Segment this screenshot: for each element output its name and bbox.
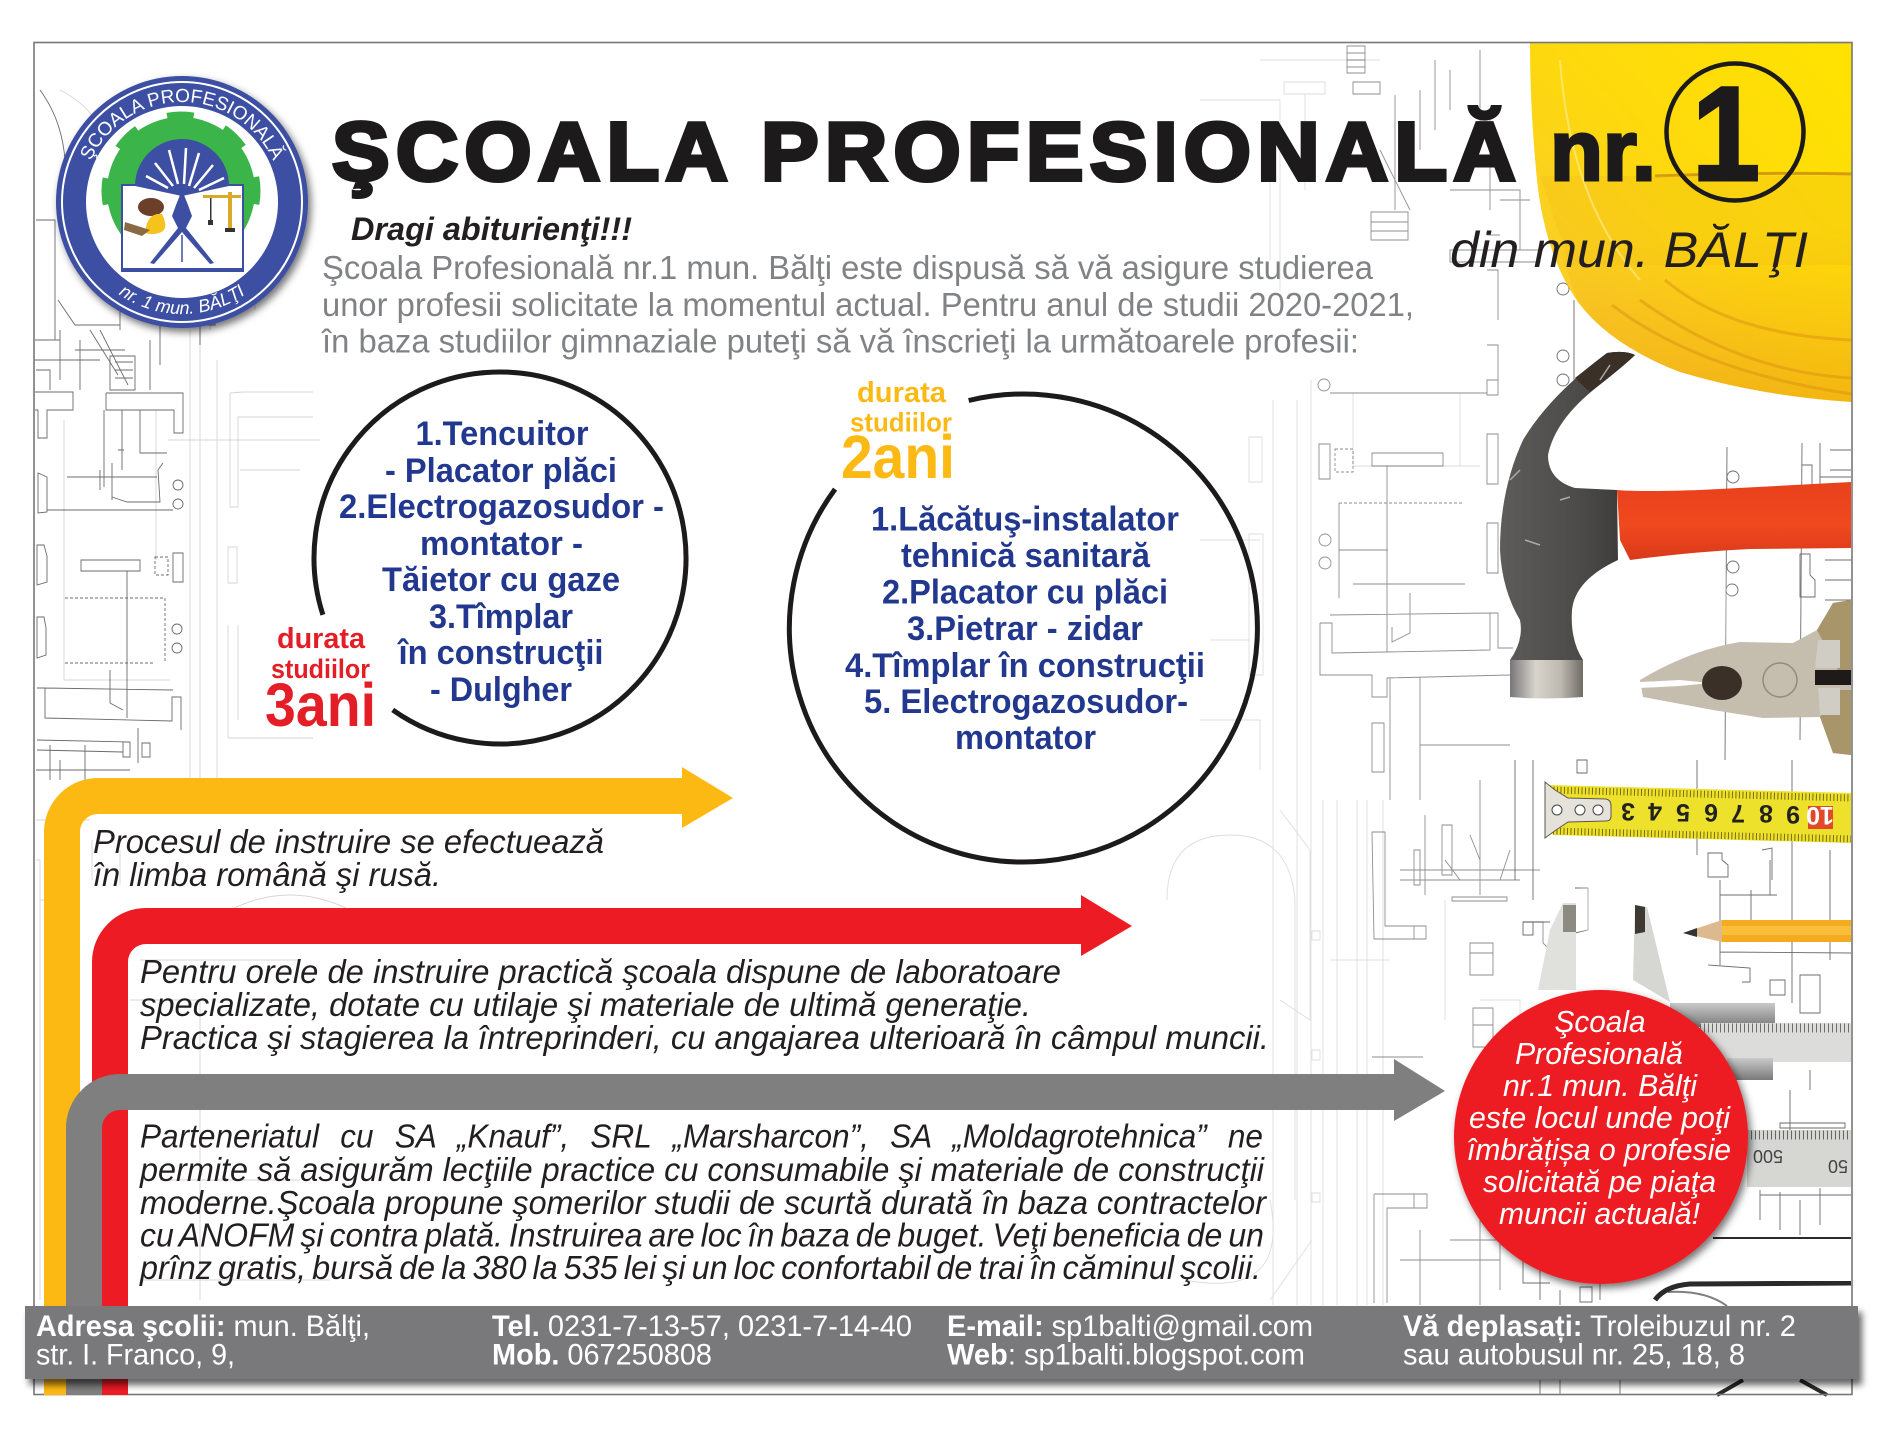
title number: 1 [1692,60,1760,209]
callout: red circle [1454,990,1748,1284]
blueprint background: right, strong lines [1318,46,1550,1305]
text block: practical training: specializate, dotate cu utilaje şi materiale de ultimă generaţie. [140,986,1031,1023]
blueprint background: centre-right, faint lines [1167,60,1520,1305]
title number: nr. [1550,104,1656,199]
text block: language of instruction: în limba română şi rusă. [93,856,441,893]
logo fan [135,139,229,196]
3-year professions list: - Placator plăci [385,452,617,490]
footer: address [36,1310,370,1371]
duration label: 2 years: studiilor [850,408,952,438]
pliers illustration [1640,600,1851,755]
2-year professions list [845,501,1205,757]
intro paragraph: în baza studiilor gimnaziale puteţi să vă înscrieţi la următoarele profesii: [321,322,1359,360]
arrow: yellow [62,767,733,1395]
text block: partnerships and benefits: prînz gratis, bursă de la 380 la 535 lei şi un loc confortabil de trai în căminul şcolii. [139,1249,1261,1286]
tape measure numbers: 8 [1759,799,1773,827]
2-year professions list: 3.Pietrar - zidar [907,610,1143,648]
tape measure numbers [1621,797,1834,829]
steel ruler illustration [1747,1130,1851,1187]
footer: directions: Vă deplasați: Troleibuzul nr. 2 [1403,1310,1796,1343]
hard hat illustration [1530,43,1852,402]
pencil illustration [1683,920,1851,942]
3-year professions list [339,415,664,709]
logo worker tools [124,198,165,236]
callout text: îmbrățișa o profesie [1467,1132,1731,1167]
3-year professions list: 1.Tencuitor [416,415,588,453]
tape measure numbers: 4 [1648,797,1662,825]
white band between glasses lines [1695,1240,1851,1281]
ruler numbers: 500 [1753,1146,1783,1166]
3-year professions list: - Dulgher [430,671,572,709]
footer: email and web: E-mail: sp1balti@gmail.com [947,1310,1313,1343]
2-year professions list: 4.Tîmplar în construcţii [845,647,1205,685]
callout text: Şcoala [1554,1004,1646,1039]
glasses illustration [1655,1238,1851,1395]
logo lettering: ŞCOALA PROFESIONALĂ [81,88,286,161]
callout text: este locul unde poţi [1469,1100,1731,1135]
tape measure numbers: 6 [1704,798,1718,826]
logo compass [150,190,214,264]
white fade behind tools [1590,420,1720,1000]
callout text: solicitată pe piaţa [1483,1164,1716,1199]
intro paragraph [321,249,1414,360]
duration label: 3 years: durata [277,623,366,655]
blueprint background: left, strong lines [34,90,215,780]
greeting: Dragi abiturienţi!!! [351,211,632,247]
intro paragraph: Şcoala Profesională nr.1 mun. Bălţi este dispusă să vă asigure studierea [322,249,1374,286]
duration label: 2 years: durata [857,377,947,409]
ruler numbers: 50 [1828,1156,1848,1176]
tape measure numbers: 10 [1806,801,1834,829]
callout text: nr.1 mun. Bălţi [1503,1068,1698,1103]
title: ŞCOALA PROFESIONALĂ [332,105,1522,198]
tape measure illustration [1545,782,1851,843]
intro paragraph: unor profesii solicitate la momentul actual. Pentru anul de studii 2020-2021, [322,286,1414,323]
3-year professions list: în construcţii [397,634,604,672]
footer contact bar [25,1306,1858,1379]
3-year professions list: Tăietor cu gaze [382,561,620,599]
logo [53,74,317,338]
footer: email and web: Web: sp1balti.blogspot.com [947,1338,1305,1371]
text block: partnerships and benefits: cu ANOFM şi contra plată. Instruirea are loc în baza de buget. Veţi beneficia de un [140,1217,1264,1254]
circle: 2-year programmes [789,377,1257,862]
duration label: 2 years [841,377,955,491]
title number [1550,60,1804,209]
arrow: grey [84,1059,1445,1395]
footer: address: str. I. Franco, 9, [36,1338,235,1371]
footer: email and web [947,1310,1313,1371]
callout text: Profesională [1515,1036,1683,1071]
text block: partnerships and benefits: Parteneriatul cu SA „Knauf”, SRL „Marsharcon”, SA „Moldagrotehnica” ne [140,1118,1263,1154]
footer: phone: Tel. 0231-7-13-57, 0231-7-14-40 [492,1310,912,1343]
footer: directions: sau autobusul nr. 25, 18, 8 [1403,1338,1745,1371]
duration label: 2 years: 2ani [841,423,955,491]
callout text: muncii actuală! [1499,1196,1700,1231]
hammer illustration [1500,352,1851,698]
footer: phone: Mob. 067250808 [492,1338,712,1371]
duration label: 3 years: studiilor [271,654,370,684]
text block: language of instruction: Procesul de instruire se efectuează [93,823,604,860]
tape measure numbers: 5 [1676,798,1690,826]
2-year professions list: montator [955,719,1096,757]
3-year professions list: 3.Tîmplar [429,598,573,636]
blueprint background: left, faint lines [36,90,360,1300]
footer: address: Adresa şcolii: mun. Bălţi, [36,1310,370,1343]
text block: partnerships and benefits: moderne.Şcoala propune şomerilor studii de scurtă durată în baza contractelor [140,1184,1268,1221]
caliper illustration [1538,903,1851,1080]
text block: practical training: Practica şi stagierea la întreprinderi, cu angajarea ulterioară în câmpul muncii. [140,1019,1269,1056]
text block: practical training: Pentru orele de instruire practică şcoala dispune de laboratoare [140,953,1061,990]
tape measure numbers: 9 [1786,800,1800,828]
logo crane [203,192,241,232]
hammer handle [1617,482,1851,560]
arrow: red [110,895,1132,1395]
text block: language of instruction [93,823,604,893]
tape measure numbers: 7 [1731,799,1745,827]
callout text [1467,1004,1731,1231]
logo book [122,185,243,269]
footer: phone [492,1310,912,1371]
2-year professions list: tehnică sanitară [901,537,1151,575]
duration label: 3 years: 3ani [265,671,376,739]
2-year professions list: 1.Lăcătuş-instalator [871,501,1179,539]
hammer head [1500,352,1635,660]
2-year professions list: 5. Electrogazosudor- [864,683,1188,721]
ruler numbers [1753,1146,1848,1176]
3-year professions list: 2.Electrogazosudor - [339,488,664,526]
subtitle: din mun. Bălţi: din mun. BĂLŢI [1450,222,1808,278]
text block: partnerships and benefits [139,1118,1268,1286]
2-year professions list: 2.Placator cu plăci [882,574,1168,612]
tape measure numbers: 3 [1621,797,1635,825]
duration label: 3 years [265,623,376,739]
text block: practical training [140,953,1269,1056]
logo gear [102,112,260,234]
blueprint background: right of tools [1515,283,1851,1395]
logo: nr. 1 mun. BĂLŢI [118,284,244,314]
3-year professions list: montator - [420,525,583,563]
circle: 3-year programmes [265,372,686,744]
text block: partnerships and benefits: permite să asigurăm lecţiile practice cu consumabile şi materiale de construcţii [139,1151,1266,1188]
footer: directions [1403,1310,1796,1371]
